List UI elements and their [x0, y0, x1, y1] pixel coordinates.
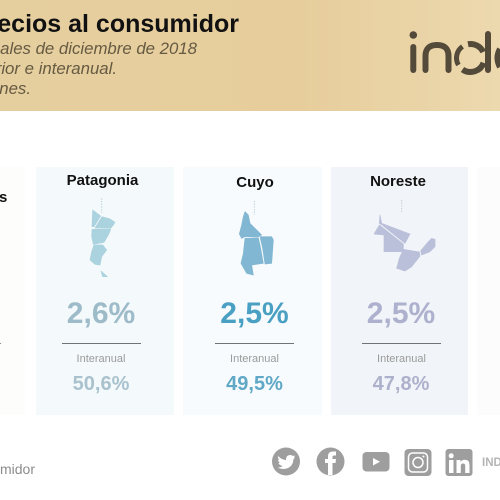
heading: Cuyo: [236, 174, 274, 191]
card: Cuyo: [183, 167, 322, 415]
monthly value: 2,5%: [220, 297, 289, 330]
yearly value: 50,6%: [73, 373, 129, 395]
icon: linkedin: [446, 449, 472, 476]
map: Patagonia: [90, 198, 116, 277]
divider: [362, 343, 441, 344]
heading: Noreste: [370, 173, 426, 190]
card: left region (partly cropped): [0, 167, 25, 415]
map: Cuyo: [239, 201, 274, 276]
label: Interanual: [377, 353, 426, 365]
subtitle: [0, 39, 197, 98]
card: Noreste: [331, 167, 468, 415]
label: Interanual: [230, 353, 279, 365]
icon: instagram: [404, 449, 432, 476]
monthly value: 2,5%: [367, 297, 435, 330]
icon: youtube: [362, 452, 390, 472]
divider: [215, 343, 294, 344]
yearly value: 47,8%: [373, 373, 429, 395]
card: right region (partly cropped): [477, 167, 500, 415]
divider: [62, 343, 141, 344]
social icons: [272, 448, 472, 476]
card: Patagonia: [36, 167, 174, 415]
monthly value: 2,6%: [67, 297, 135, 330]
yearly value: 49,5%: [226, 373, 283, 395]
label: Interanual: [77, 353, 125, 365]
heading: Patagonia: [67, 172, 138, 189]
divider: [0, 343, 1, 344]
map: Noreste: [374, 200, 436, 272]
logo: indec: [410, 31, 500, 75]
header band: [0, 0, 500, 111]
icon: facebook: [316, 448, 344, 476]
icon: twitter: [272, 448, 300, 476]
